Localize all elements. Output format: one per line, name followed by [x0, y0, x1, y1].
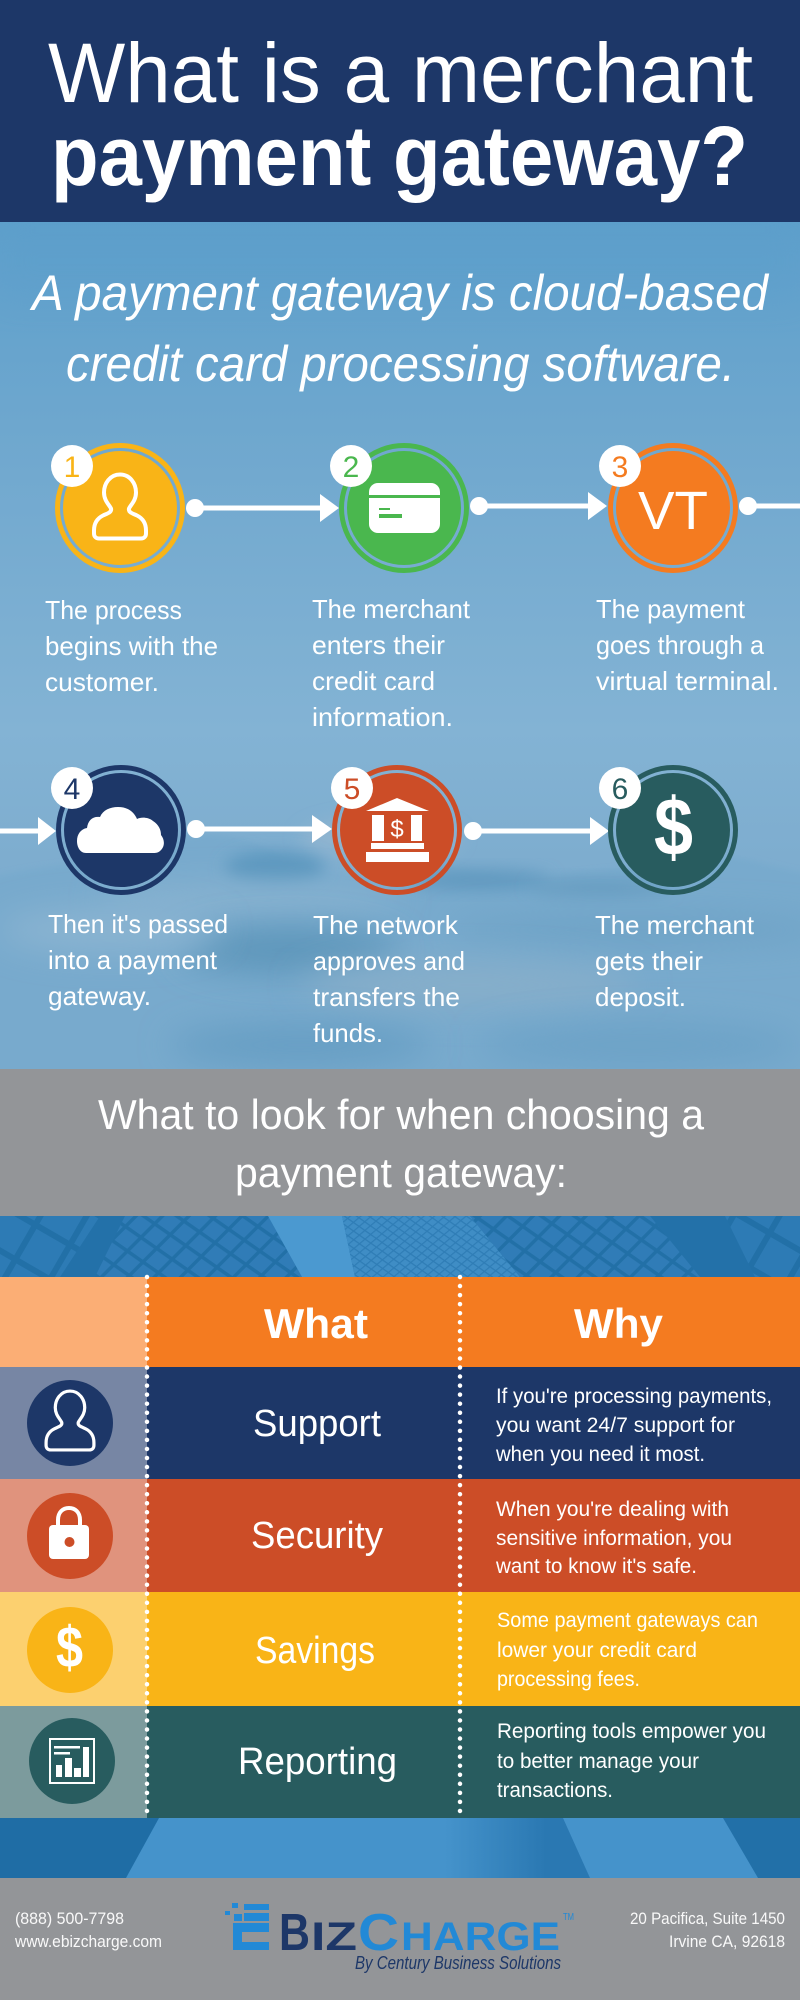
- step 3 text: virtual terminal.: [596, 666, 779, 696]
- why: reporting: [497, 1720, 766, 1802]
- number badge 2: 2: [343, 451, 359, 484]
- subtitle: A payment gateway is cloud-based: [29, 265, 770, 321]
- step 3 text: [596, 594, 779, 696]
- why: reporting: transactions.: [497, 1779, 613, 1802]
- logo wordmark: TM: [563, 1912, 574, 1923]
- number badge 6: 6: [612, 773, 628, 806]
- why: support: If you're processing payments,: [496, 1385, 772, 1408]
- step 1 text: customer.: [45, 667, 159, 697]
- contact: address: [630, 1909, 785, 1951]
- logo mark: [225, 1903, 269, 1950]
- arrow: into step 4: [0, 817, 56, 845]
- title: [48, 26, 753, 203]
- why: savings: processing fees.: [497, 1668, 640, 1691]
- column heading: Why: Why: [574, 1300, 664, 1347]
- arrow: step 3 onward: [739, 497, 800, 515]
- table row: reporting: [0, 1706, 800, 1818]
- logo tagline: By Century Business Solutions: [355, 1953, 561, 1973]
- contact: phone and web: (888) 500-7798: [15, 1909, 124, 1928]
- contact: address: 20 Pacifica, Suite 1450: [630, 1909, 785, 1928]
- why: security: [495, 1498, 732, 1578]
- icon: dollar: [27, 1607, 113, 1693]
- step 6 text: [595, 910, 755, 1012]
- section heading: What to look for when choosing a: [98, 1091, 705, 1138]
- step 5 text: transfers the: [313, 982, 460, 1012]
- why: security: want to know it's safe.: [495, 1555, 697, 1578]
- step 2 text: The merchant: [312, 594, 471, 624]
- label: Savings: Savings: [255, 1630, 375, 1672]
- icon: bank circle: [334, 768, 460, 892]
- icon: dollar circle: $: [654, 782, 693, 873]
- step 6: [595, 767, 755, 1012]
- icon: bank circle: $: [390, 816, 404, 843]
- why: reporting: to better manage your: [497, 1750, 699, 1773]
- icon: dollar: $: [56, 1615, 83, 1680]
- number badge 1: [51, 445, 93, 487]
- step 6 text: deposit.: [595, 982, 686, 1012]
- column heading: What: What: [264, 1300, 368, 1347]
- subtitle: credit card processing software.: [66, 336, 735, 392]
- step 5: [313, 767, 465, 1048]
- logo wordmark: B: [279, 1904, 310, 1962]
- sky background panel: [0, 222, 800, 1090]
- icon: support person: [27, 1380, 113, 1466]
- number badge 1: 1: [64, 451, 80, 484]
- number badge 3: [599, 445, 641, 487]
- step 4 text: Then it's passed: [48, 909, 228, 939]
- icon: cloud circle: [58, 768, 184, 892]
- why: savings: Some payment gateways can: [497, 1609, 758, 1632]
- logo wordmark: IZ: [311, 1915, 357, 1959]
- header band: [0, 0, 800, 222]
- why: security: When you're dealing with: [496, 1498, 729, 1521]
- step 4 text: gateway.: [48, 981, 151, 1011]
- number badge 4: 4: [64, 773, 80, 806]
- icon: customer circle: [58, 446, 182, 570]
- step 3 text: The payment: [596, 594, 746, 624]
- icon: dollar circle: [610, 768, 736, 892]
- icon: virtual terminal circle: VT: [638, 481, 708, 541]
- table header row: [0, 1277, 800, 1367]
- step 1 text: [45, 595, 218, 697]
- buildings band bottom: [0, 1818, 800, 1878]
- step 2 text: information.: [312, 702, 453, 732]
- logo wordmark: [279, 1904, 574, 1962]
- icon: virtual terminal circle: [610, 446, 736, 570]
- why: security: sensitive information, you: [496, 1527, 732, 1550]
- label: Support: Support: [253, 1403, 381, 1445]
- why: savings: lower your credit card: [497, 1639, 697, 1662]
- subtitle: [29, 265, 770, 392]
- arrow: step 2 to 3: [470, 492, 607, 520]
- step 5 text: The network: [313, 910, 459, 940]
- section heading: [98, 1091, 705, 1196]
- step 1 text: begins with the: [45, 631, 218, 661]
- number badge 5: 5: [344, 773, 360, 806]
- table row: savings: [0, 1592, 800, 1706]
- step 4: [48, 767, 228, 1011]
- step 5 text: [313, 910, 465, 1048]
- step 2 text: enters their: [312, 630, 445, 660]
- number badge 4: [51, 767, 93, 809]
- why: reporting: Reporting tools empower you: [497, 1720, 766, 1743]
- why: savings: [497, 1609, 758, 1691]
- number badge 5: [331, 767, 373, 809]
- buildings band top: [0, 1216, 800, 1277]
- contact: phone and web: www.ebizcharge.com: [14, 1932, 162, 1951]
- footer: [0, 1878, 800, 2000]
- title: payment gateway?: [51, 109, 748, 203]
- step 2 text: [312, 594, 471, 732]
- title: What is a merchant: [48, 26, 753, 120]
- logo: EBizCharge: [225, 1903, 574, 1973]
- icon: padlock: [27, 1493, 113, 1579]
- why: support: when you need it most.: [495, 1443, 705, 1466]
- table row: security: [0, 1479, 800, 1592]
- step 5 text: approves and: [313, 946, 465, 976]
- icon: report chart: [29, 1718, 115, 1804]
- step 6 text: gets their: [595, 946, 703, 976]
- number badge 2: [330, 445, 372, 487]
- step 5 text: funds.: [313, 1018, 383, 1048]
- icon: credit card circle: [342, 446, 466, 570]
- logo wordmark: HARGE: [401, 1915, 560, 1959]
- step 1: [45, 445, 218, 697]
- contact: address: Irvine CA, 92618: [669, 1932, 785, 1951]
- label: Reporting: Reporting: [238, 1741, 397, 1783]
- why: support: you want 24/7 support for: [496, 1414, 735, 1437]
- step 4 text: [48, 909, 228, 1011]
- section heading band: [0, 1069, 800, 1216]
- step 4 text: into a payment: [48, 945, 218, 975]
- step 6 text: The merchant: [595, 910, 755, 940]
- why: support: [495, 1385, 772, 1466]
- section heading: payment gateway:: [235, 1149, 567, 1196]
- logo wordmark: C: [358, 1904, 399, 1962]
- label: Security: Security: [251, 1515, 383, 1557]
- step 3: [596, 445, 779, 696]
- number badge 6: [599, 767, 641, 809]
- step 2 text: credit card: [312, 666, 435, 696]
- arrow: step 1 to 2: [186, 494, 339, 522]
- number badge 3: 3: [612, 451, 628, 484]
- arrow: step 4 to 5: [187, 815, 332, 843]
- table row: support: [0, 1367, 800, 1479]
- step 1 text: The process: [45, 595, 182, 625]
- contact: phone and web: [14, 1909, 162, 1951]
- step 2: [312, 445, 471, 732]
- step 3 text: goes through a: [596, 630, 765, 660]
- arrow: step 5 to 6: [464, 817, 609, 845]
